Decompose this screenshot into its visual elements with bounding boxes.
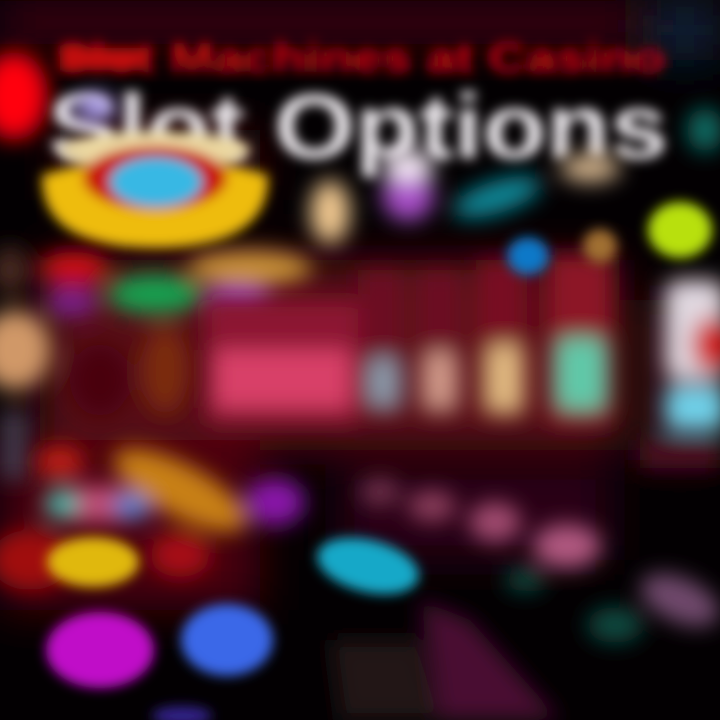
red glow left: [0, 52, 48, 140]
illuminated buttons: [46, 528, 425, 720]
top red text band: Slot Machines at Casino: [55, 34, 665, 81]
slot reels row: [205, 255, 612, 425]
bright indicator lights: [507, 202, 712, 275]
lower right console lights: [330, 478, 720, 720]
title colour accents: [75, 94, 720, 244]
title: Slot Options: [48, 76, 668, 178]
right machine: [640, 280, 720, 468]
left machine panels: [0, 246, 312, 480]
lower left controls: [0, 432, 305, 590]
smiling yellow emblem: [42, 132, 268, 248]
